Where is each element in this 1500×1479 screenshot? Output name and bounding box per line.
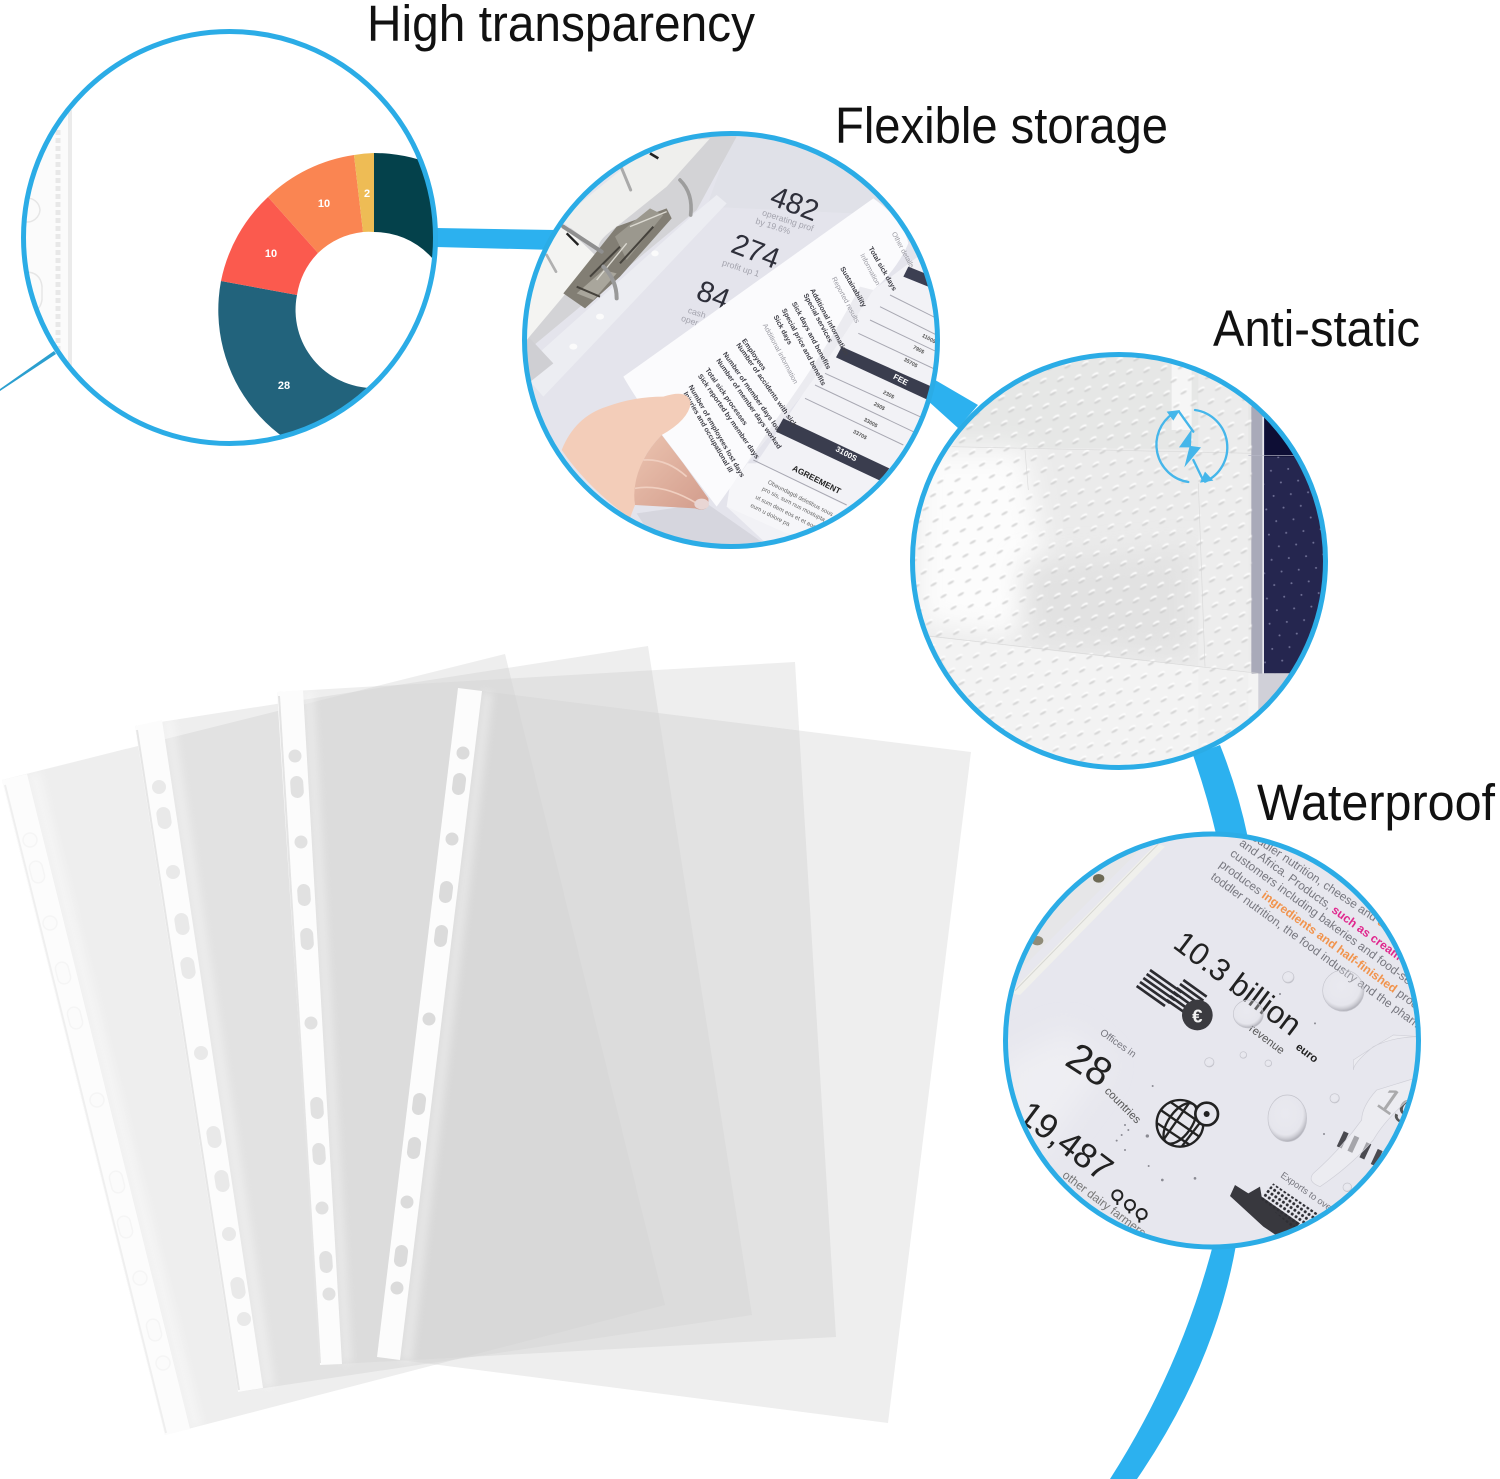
statistic: 10.3 billion revenue: revenue xyxy=(1247,1023,1286,1057)
donut chart xyxy=(218,153,433,435)
lower page with fee table: Obeundagdi deletibus sous xyxy=(766,480,834,518)
donut chart: 10 xyxy=(265,248,277,260)
page being turned: Additional information xyxy=(808,288,849,357)
statistic: 19,487: 19,487 xyxy=(1011,1094,1120,1189)
textured film shading xyxy=(918,357,1258,770)
statistic: partial figure, people and ship: 19 xyxy=(1370,1080,1425,1134)
heading: anti-static: Anti-static xyxy=(1213,300,1420,357)
donut chart: 10 xyxy=(318,198,330,210)
body copy with highlights: produces ingredients and half-finished products xyxy=(1217,857,1440,1025)
panel: waterproof circle xyxy=(1000,828,1440,1257)
pocket bodies with overlap shading xyxy=(2,646,971,1435)
embossed dot texture xyxy=(905,357,1252,770)
figures on the inserted page: 274 xyxy=(727,227,784,276)
lower page with fee table: 3370$ xyxy=(852,429,868,441)
icon: banknote stacks with euro coin xyxy=(1137,970,1213,1030)
panel: flexible storage circle: cash xyxy=(687,305,707,320)
statistic: offices in 28 countries xyxy=(1065,1030,1140,1124)
connector: thin line left of first circle xyxy=(0,351,56,391)
dark backing page at right xyxy=(1248,407,1332,710)
lower page with fee table: ut sum dem eos et et aos xyxy=(754,495,817,531)
page being turned: Other details xyxy=(890,231,915,270)
page being turned: Reported results xyxy=(830,276,860,325)
lower page with fee table: FEE xyxy=(892,372,910,388)
lower page with fee table: eum u dolore pa xyxy=(749,503,791,528)
page being turned: Employees xyxy=(740,338,767,372)
hand holding the page xyxy=(562,394,709,518)
donut chart: 28 xyxy=(278,380,290,392)
lower page with fee table: pro sis, sum nus mostupta xyxy=(761,486,826,524)
figures on the inserted page: 482 xyxy=(766,180,823,228)
page being turned: Number of member days lost xyxy=(721,351,782,435)
pocket 2 punched strip xyxy=(135,720,263,1392)
pocket 3 punched strip xyxy=(277,690,342,1365)
panel: flexible storage circle: profit up 1 xyxy=(721,257,761,279)
page being turned: Sick days and benefits xyxy=(790,301,831,371)
fold lines xyxy=(928,447,1258,673)
lower page with fee table: AGREEMENT xyxy=(791,463,843,496)
lower page with fee table: 3300$ xyxy=(862,417,878,429)
body copy with highlights: customers including bakeries and food-service xyxy=(1228,846,1435,1002)
panel: flexible storage circle: by 19.6% xyxy=(754,216,792,236)
page being turned xyxy=(623,198,915,507)
binder and metal rings xyxy=(527,136,736,396)
page being turned: Special price and benefits xyxy=(780,308,827,387)
connector: circle 4 to bottom edge xyxy=(1110,1245,1236,1479)
lower page with fee table: 3570$ xyxy=(902,357,918,369)
figures on the inserted page: 84 xyxy=(692,274,734,317)
panel: high transparency circle xyxy=(21,29,438,446)
panel: flexible storage circle: oper xyxy=(680,313,700,328)
panel: flexible storage circle xyxy=(520,130,940,550)
page being turned: Additional information xyxy=(761,323,799,385)
page being turned: Total sick processes xyxy=(703,367,748,427)
donut chart: 2 xyxy=(364,188,370,200)
lower page with fee table: 230$ xyxy=(882,390,895,401)
page being turned: Information xyxy=(858,253,881,287)
icon: anti-static bolt with arrows xyxy=(1156,410,1227,483)
connector: circle 1 to circle 2 xyxy=(436,228,556,250)
page being turned: Special services xyxy=(802,293,833,344)
lower page with fee table: 250$ xyxy=(872,401,886,412)
panel: flexible storage circle: operating prof xyxy=(761,207,816,234)
statistic: 19,487 xyxy=(1024,1104,1148,1233)
statistic: 19,487: other dairy farmers xyxy=(1060,1168,1149,1240)
statistic: 10.3 billion revenue: 10.3 billion xyxy=(1167,924,1308,1042)
statistic: partial figure, people and ship: Exports to over xyxy=(1279,1170,1336,1214)
page being turned: Sick days xyxy=(772,314,793,346)
pocket strip with holes xyxy=(1014,844,1164,994)
connector: circle 2 to circle 3 xyxy=(927,377,978,428)
page being turned: Total sick days xyxy=(867,246,897,292)
icon: globe with pin xyxy=(1157,1098,1218,1149)
statistic: offices in 28 countries: Offices in xyxy=(1098,1027,1138,1060)
figures on the inserted page xyxy=(692,180,823,317)
statistic: partial figure, people and ship xyxy=(1230,1080,1425,1240)
body copy with highlights: toddler nutrition, the food industry and the pharma xyxy=(1208,869,1431,1037)
lower page with fee table: 1100$ xyxy=(921,333,936,345)
icon: banknote stacks with euro coin: € xyxy=(1192,1005,1203,1026)
connector: circle 3 to circle 4 xyxy=(1193,745,1248,838)
pocket 4 punched strip xyxy=(377,688,482,1360)
body copy with highlights: and Africa. Products, such as cream and xyxy=(1237,836,1424,977)
lower page with fee table: 790$ xyxy=(912,345,925,356)
panel: anti-static circle xyxy=(905,350,1332,777)
page being turned: Number of employees lost days xyxy=(687,384,745,479)
body copy with highlights: toddler nutrition, cheese and dessert xyxy=(1247,828,1418,950)
lower page with fee table: 3100S xyxy=(834,444,859,464)
pocket 1 punched strip xyxy=(2,774,190,1435)
pocket edge seen through the sheet xyxy=(26,110,72,366)
water droplets xyxy=(1205,970,1420,1192)
page being turned: Number of accidents with sick xyxy=(734,342,798,429)
statistic: offices in 28 countries: countries xyxy=(1102,1085,1143,1127)
heading: flexible storage: Flexible storage xyxy=(835,97,1168,154)
lower page with fee table xyxy=(637,240,940,550)
statistic: offices in 28 countries: 28 xyxy=(1058,1035,1120,1096)
heading: waterproof: Waterproof xyxy=(1257,774,1496,831)
statistic: 10.3 billion revenue: euro xyxy=(1293,1041,1320,1066)
pale film folds xyxy=(1000,1030,1107,1163)
stack of clear punched pockets xyxy=(2,646,971,1435)
page being turned: Number of member days worked xyxy=(714,358,782,451)
tiny droplet specks xyxy=(1116,993,1325,1181)
page being turned: Injuries and occupational ill xyxy=(682,391,734,474)
page being turned: Sick reported by member days xyxy=(696,373,760,461)
page being turned: Sustainability xyxy=(838,266,867,309)
